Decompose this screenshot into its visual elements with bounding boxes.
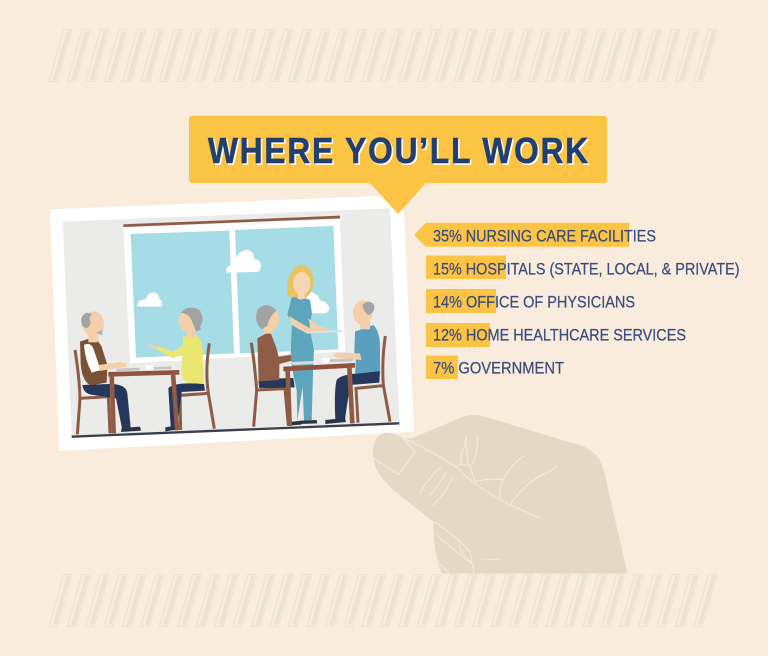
list: workplace shares (414, 223, 740, 379)
banner: heading (189, 116, 607, 214)
hand crease lines (374, 437, 557, 573)
man in brown vest (80, 311, 141, 432)
clouds (137, 250, 329, 313)
right table group (251, 265, 390, 427)
icon: hand holding photo (373, 415, 628, 573)
left table with dishes (108, 365, 179, 433)
photo: dining room scene (50, 195, 414, 451)
title: WHERE YOU’LL WORK (208, 131, 589, 171)
banner shape (189, 116, 607, 214)
man in blue (325, 300, 380, 424)
wall (63, 208, 399, 437)
window (123, 217, 345, 363)
floor line (72, 423, 399, 437)
row: home healthcare services (426, 323, 686, 347)
chair: left woman (180, 343, 214, 430)
chair: right man (356, 336, 390, 423)
woman in brown (256, 305, 308, 388)
row: government (426, 356, 564, 379)
decorative stripe band: bottom (48, 574, 718, 627)
decorative stripe band: top (48, 29, 718, 82)
chair: left man (75, 350, 110, 434)
photo white frame (50, 195, 414, 451)
title shadow: WHERE YOU’LL WORK (210, 133, 590, 173)
left table group (75, 307, 214, 434)
nurse (287, 265, 342, 425)
woman in yellow (148, 307, 205, 431)
row: nursing care facilities (414, 223, 656, 247)
chair: right woman (251, 343, 288, 427)
row: nursing care facilities: 35% NURSING CARE FACILITIES (433, 226, 656, 246)
row: office of physicians: 14% OFFICE OF PHYSICIANS (433, 292, 635, 312)
row: office of physicians (426, 289, 635, 313)
row: home healthcare services: 12% HOME HEALTHCARE SERVICES (433, 326, 686, 344)
hand silhouette (373, 415, 628, 573)
row: government: 7% GOVERNMENT (433, 358, 564, 378)
right table with dishes (283, 358, 355, 426)
